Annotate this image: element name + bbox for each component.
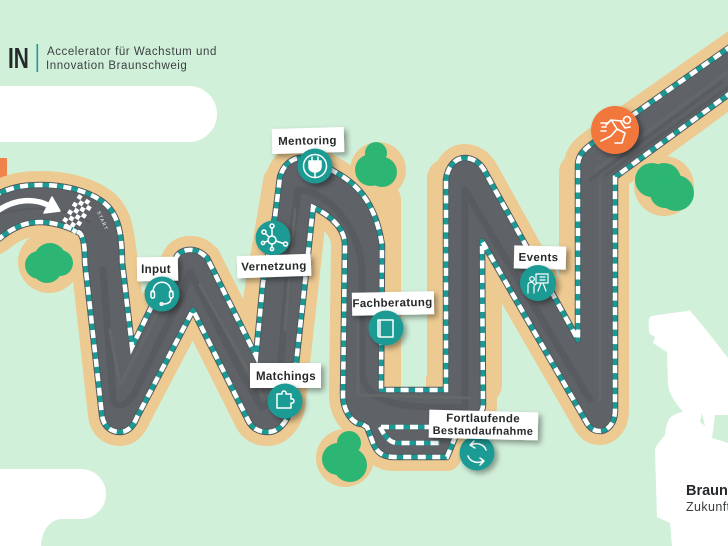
icon: plug [298,148,332,184]
icon: presenter [520,265,556,301]
lion statue silhouette [649,310,728,546]
start arrow [0,197,60,213]
white banner pill [0,86,217,142]
station: Fortlaufende Bestandaufnahme: Bestandaufnahme [433,425,533,438]
icon: headset [144,276,180,312]
station: Fachberatung: Fachberatung [352,297,433,310]
tree top middle [355,142,397,187]
start text: START [96,210,109,231]
tyre marks [0,70,728,408]
station: Fachberatung [352,291,434,346]
logo and tagline: Innovation Braunschweig [46,60,187,72]
pit lane kerb [380,427,440,443]
icon: network [256,220,290,256]
station: Mentoring [272,127,344,184]
checkered start line [60,194,94,234]
station: Events [514,245,566,301]
icon: book [368,310,404,346]
goal runner badge [591,106,639,154]
icon: puzzle [268,384,302,418]
logo and tagline: IN [8,43,29,75]
logo and tagline [8,43,217,75]
green gap between road sections [401,300,426,388]
station: Fortlaufende Bestandaufnahme: Fortlaufende [446,413,520,425]
station: Input [137,257,180,312]
statue caption [686,483,728,514]
station: Input: Input [141,264,171,276]
station: Mentoring: Mentoring [278,135,337,148]
orange start marker [0,158,7,178]
icon: cycle arrows [460,436,494,470]
icon: running person [601,116,630,143]
tree right [635,163,694,211]
station: Vernetzung [237,220,311,278]
white shape bottom left [0,469,106,546]
station: Vernetzung: Vernetzung [241,260,307,274]
station: Events: Events [519,252,558,264]
station: Fortlaufende Bestandaufnahme [429,410,538,470]
race track [0,40,728,457]
station: Matchings: Matchings [256,371,316,383]
track kerb [0,40,728,457]
tree left [25,243,73,283]
logo and tagline: Accelerator für Wachstum und [47,46,217,58]
tree bottom middle [322,431,367,482]
station: Matchings [250,363,321,418]
